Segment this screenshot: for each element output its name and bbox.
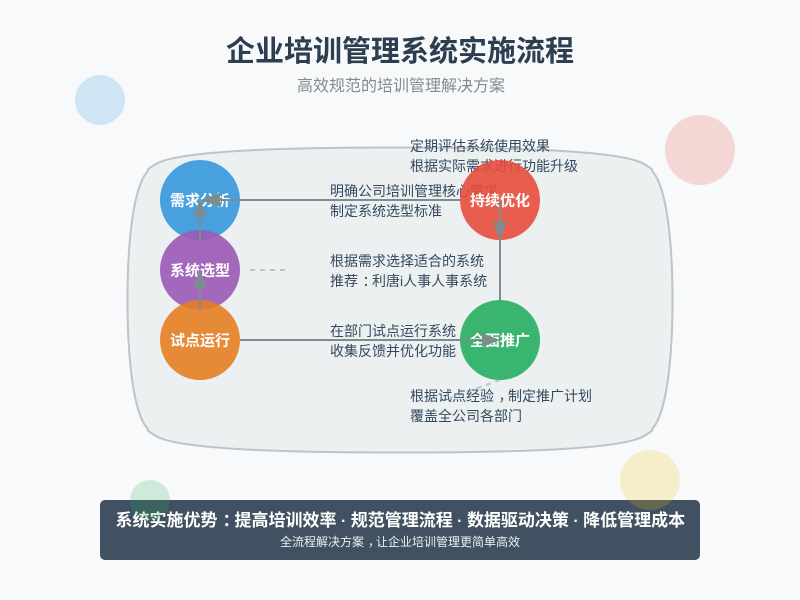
decorative circle: blue (75, 75, 125, 125)
node: needs analysis (160, 160, 240, 240)
arrow: selection to analysis (193, 199, 207, 240)
node: continuous optimization (460, 160, 540, 240)
text block: continuous optimization: 定期评估系统使用效果 (410, 138, 550, 154)
arrow: optimization to analysis (200, 193, 460, 207)
node: full rollout: 全面推广 (470, 332, 530, 350)
dashed connector: rollout note (450, 380, 500, 398)
text block: full rollout: 根据试点经验 ，制定推广计划 (410, 388, 592, 404)
footer subline: 全流程解决方案 ，让企业培训管理更简单高效 (280, 534, 520, 549)
decorative circle: yellow (620, 450, 680, 510)
node: continuous optimization: 持续优化 (470, 192, 530, 210)
panel: process background (128, 148, 672, 452)
text block: needs analysis: 明确公司培训管理核心需求 (330, 183, 498, 199)
decorative circle: red (665, 115, 735, 185)
arrow: pilot to selection (193, 270, 207, 310)
footer headline: 系统实施优势 ：提高培训效率 · 规范管理流程 · 数据驱动决策 · 降低管理成本 (116, 510, 685, 530)
decorative circle: green (130, 480, 170, 520)
node: pilot run (160, 300, 240, 380)
dashed connector: selection note (250, 269, 290, 271)
node: system selection: 系统选型 (170, 262, 230, 280)
text block: system selection: 根据需求选择适合的系统 (330, 253, 484, 269)
text block: pilot run: 收集反馈并优化功能 (330, 343, 456, 359)
text block: continuous optimization: 根据实际需求进行功能升级 (410, 158, 578, 174)
text block: system selection: 推荐 ：利唐i人事人事系统 (330, 273, 487, 289)
text block: full rollout: 覆盖全公司各部门 (410, 408, 522, 424)
text block: pilot run: 在部门试点运行系统 (330, 323, 456, 339)
node: full rollout (460, 300, 540, 380)
title: 企业培训管理系统实施流程 (226, 35, 574, 68)
footer banner (100, 500, 700, 560)
subtitle: 高效规范的培训管理解决方案 (297, 77, 505, 95)
text block: needs analysis: 制定系统选型标准 (330, 203, 442, 219)
node: needs analysis: 需求分析 (170, 192, 230, 210)
node: pilot run: 试点运行 (170, 332, 230, 350)
arrow: pilot to rollout (240, 333, 500, 347)
arrow: rollout to optimization (493, 200, 507, 300)
node: system selection (160, 230, 240, 310)
